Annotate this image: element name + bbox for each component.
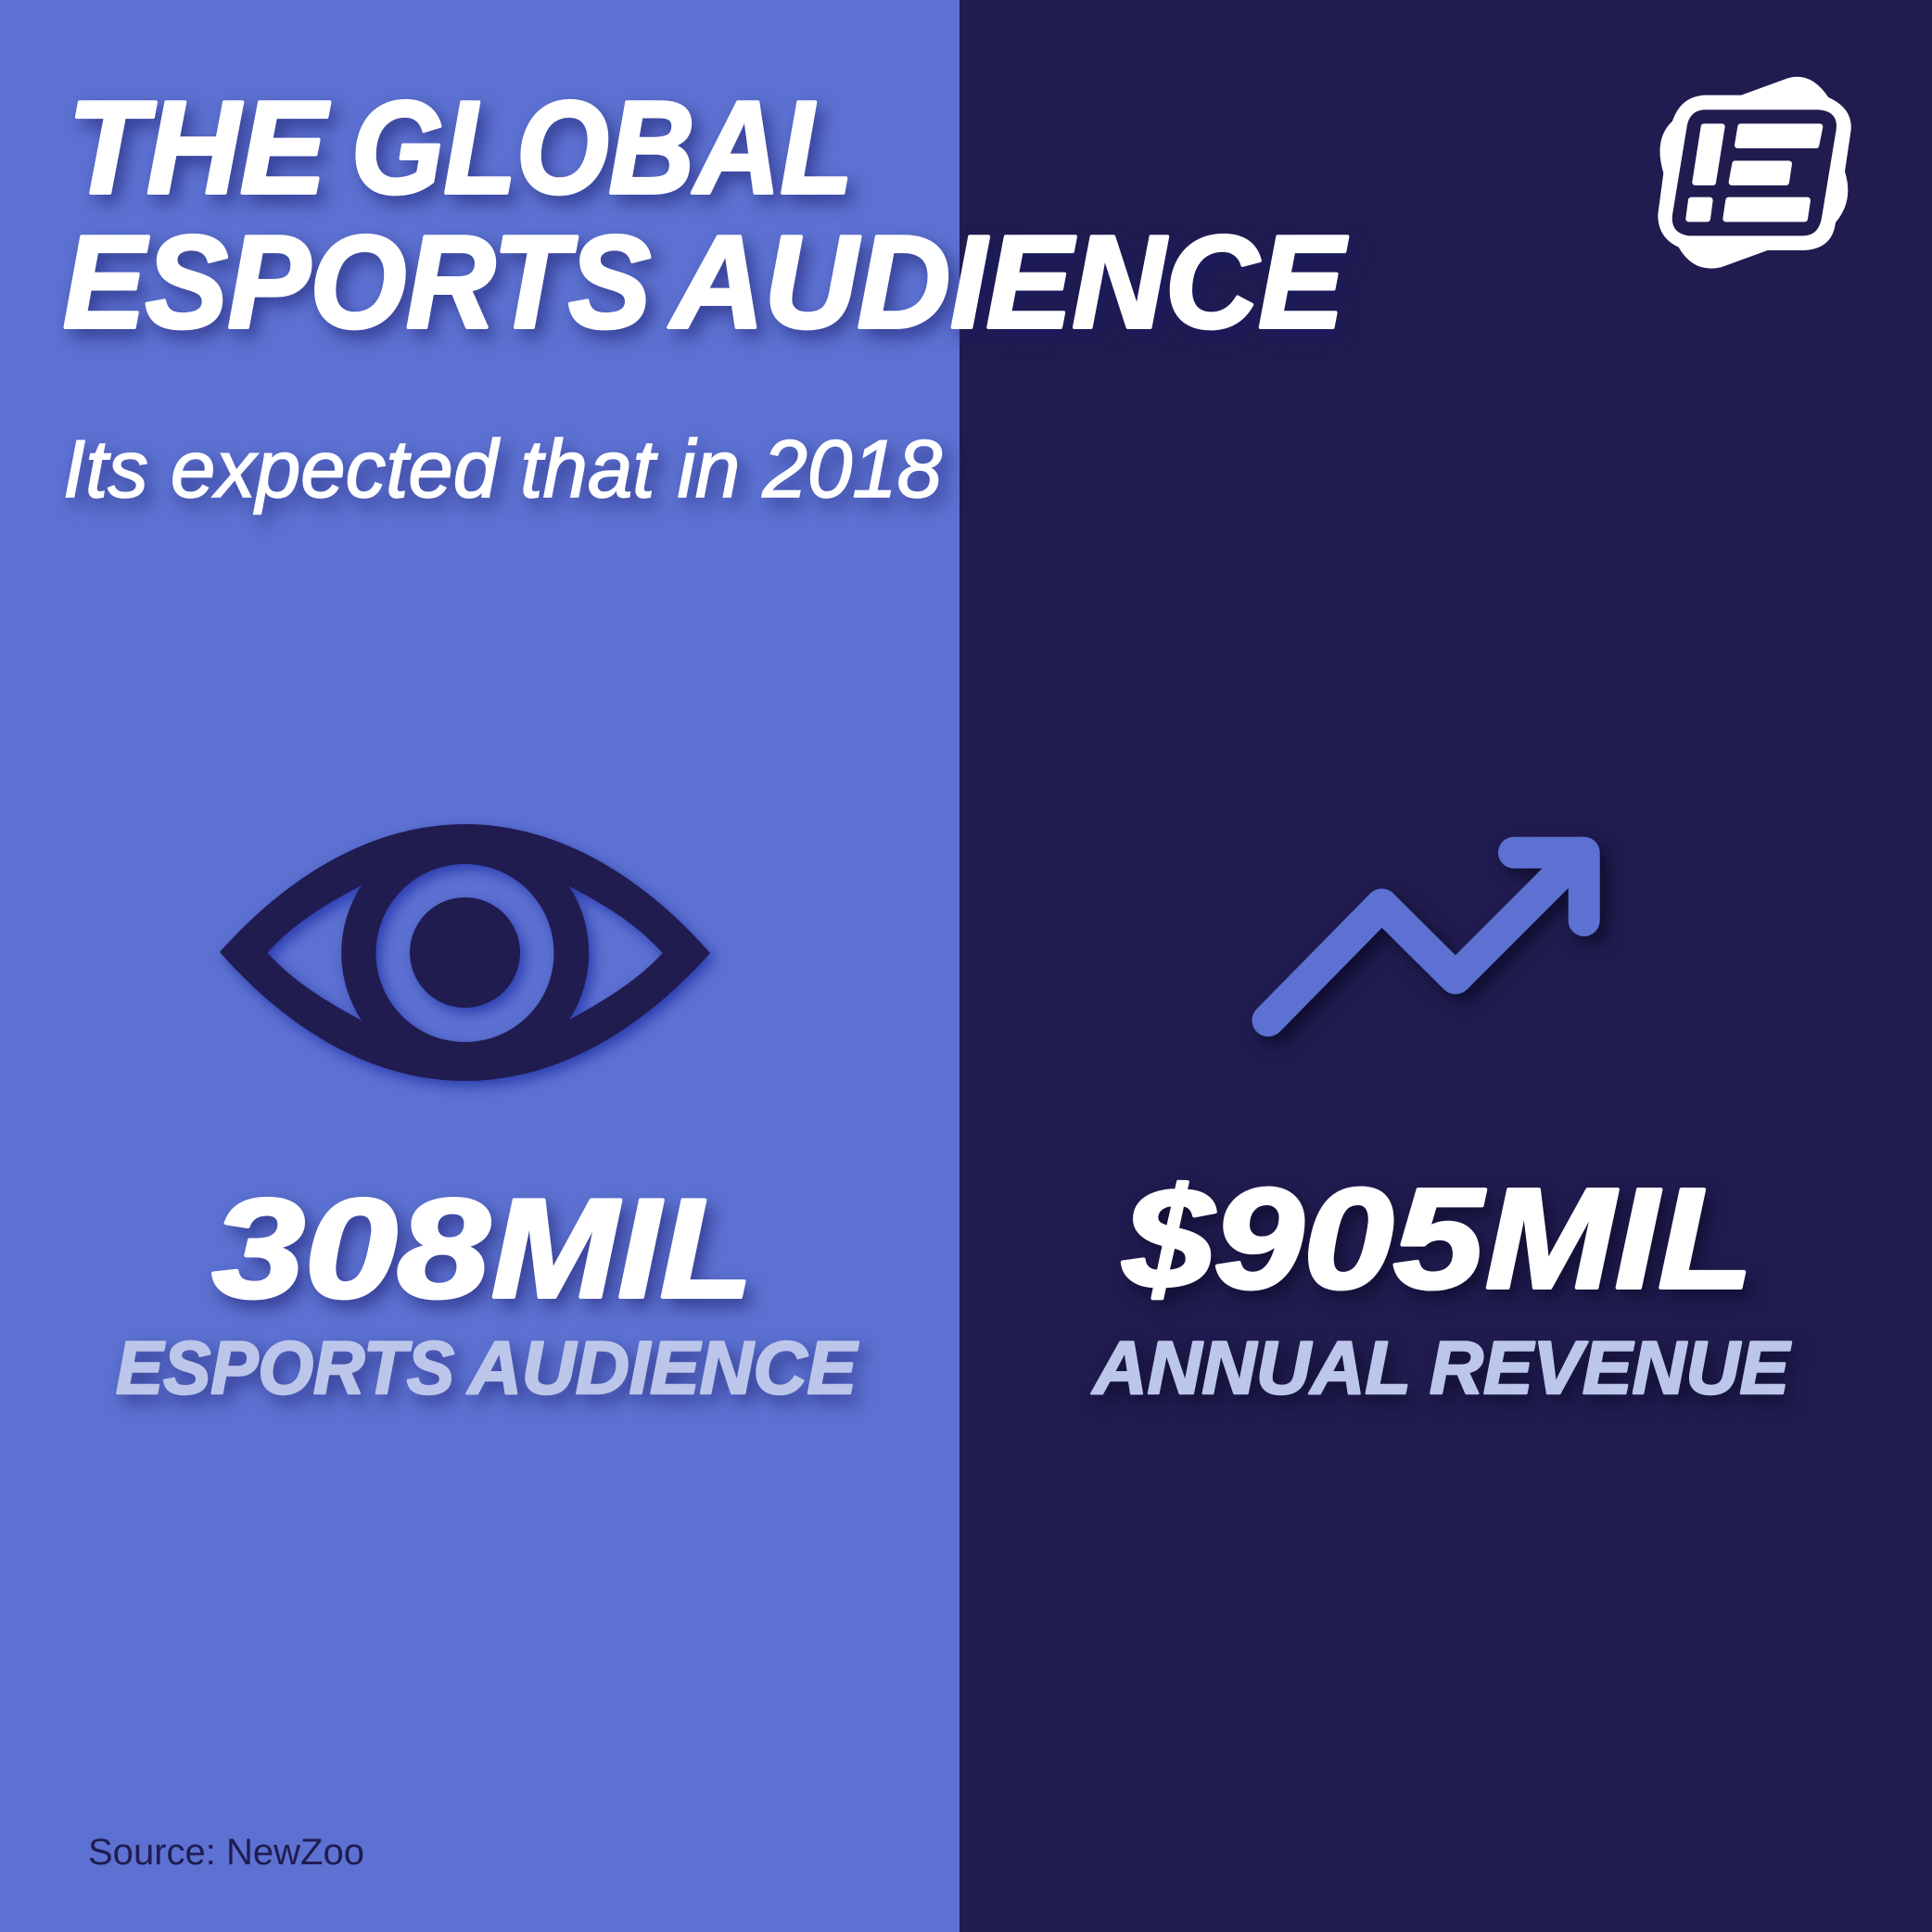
label: annual revenue: ANNUAL: [1091, 1327, 1411, 1410]
label: esports audience: ESPORTS: [116, 1327, 454, 1410]
label: esports audience: AUDIENCE: [466, 1327, 859, 1410]
label: annual revenue: REVENUE: [1430, 1327, 1792, 1410]
title: ESPORTS: [63, 209, 651, 356]
icon: rising trend arrow: [1268, 853, 1584, 1021]
value: 308MIL: MIL: [491, 1170, 753, 1328]
value: $905MIL: $905: [1123, 1159, 1486, 1318]
stat: 308MIL esports audience: [116, 1170, 859, 1410]
value: $905MIL: MIL: [1485, 1159, 1753, 1318]
value: 308MIL: [212, 1170, 753, 1328]
panel: left audience background: [0, 0, 960, 1932]
icon: eye: [220, 824, 710, 1081]
panel: right revenue background: [960, 0, 1932, 1932]
title: AUDIENCE: [668, 209, 1348, 356]
source note: Source: NewZoo: [88, 1832, 364, 1873]
icon: esports logo badge: [1658, 77, 1851, 269]
stat: $905MIL annual revenue: [1091, 1159, 1792, 1410]
title: [63, 74, 1348, 356]
title: THE: [68, 74, 330, 222]
subtitle: Its expected that in 2018: [63, 423, 942, 515]
value: 308MIL: 308: [212, 1170, 490, 1328]
value: $905MIL: [1123, 1159, 1753, 1318]
label: esports audience: [116, 1327, 859, 1410]
label: annual revenue: [1091, 1327, 1792, 1410]
title: GLOBAL: [351, 74, 853, 222]
